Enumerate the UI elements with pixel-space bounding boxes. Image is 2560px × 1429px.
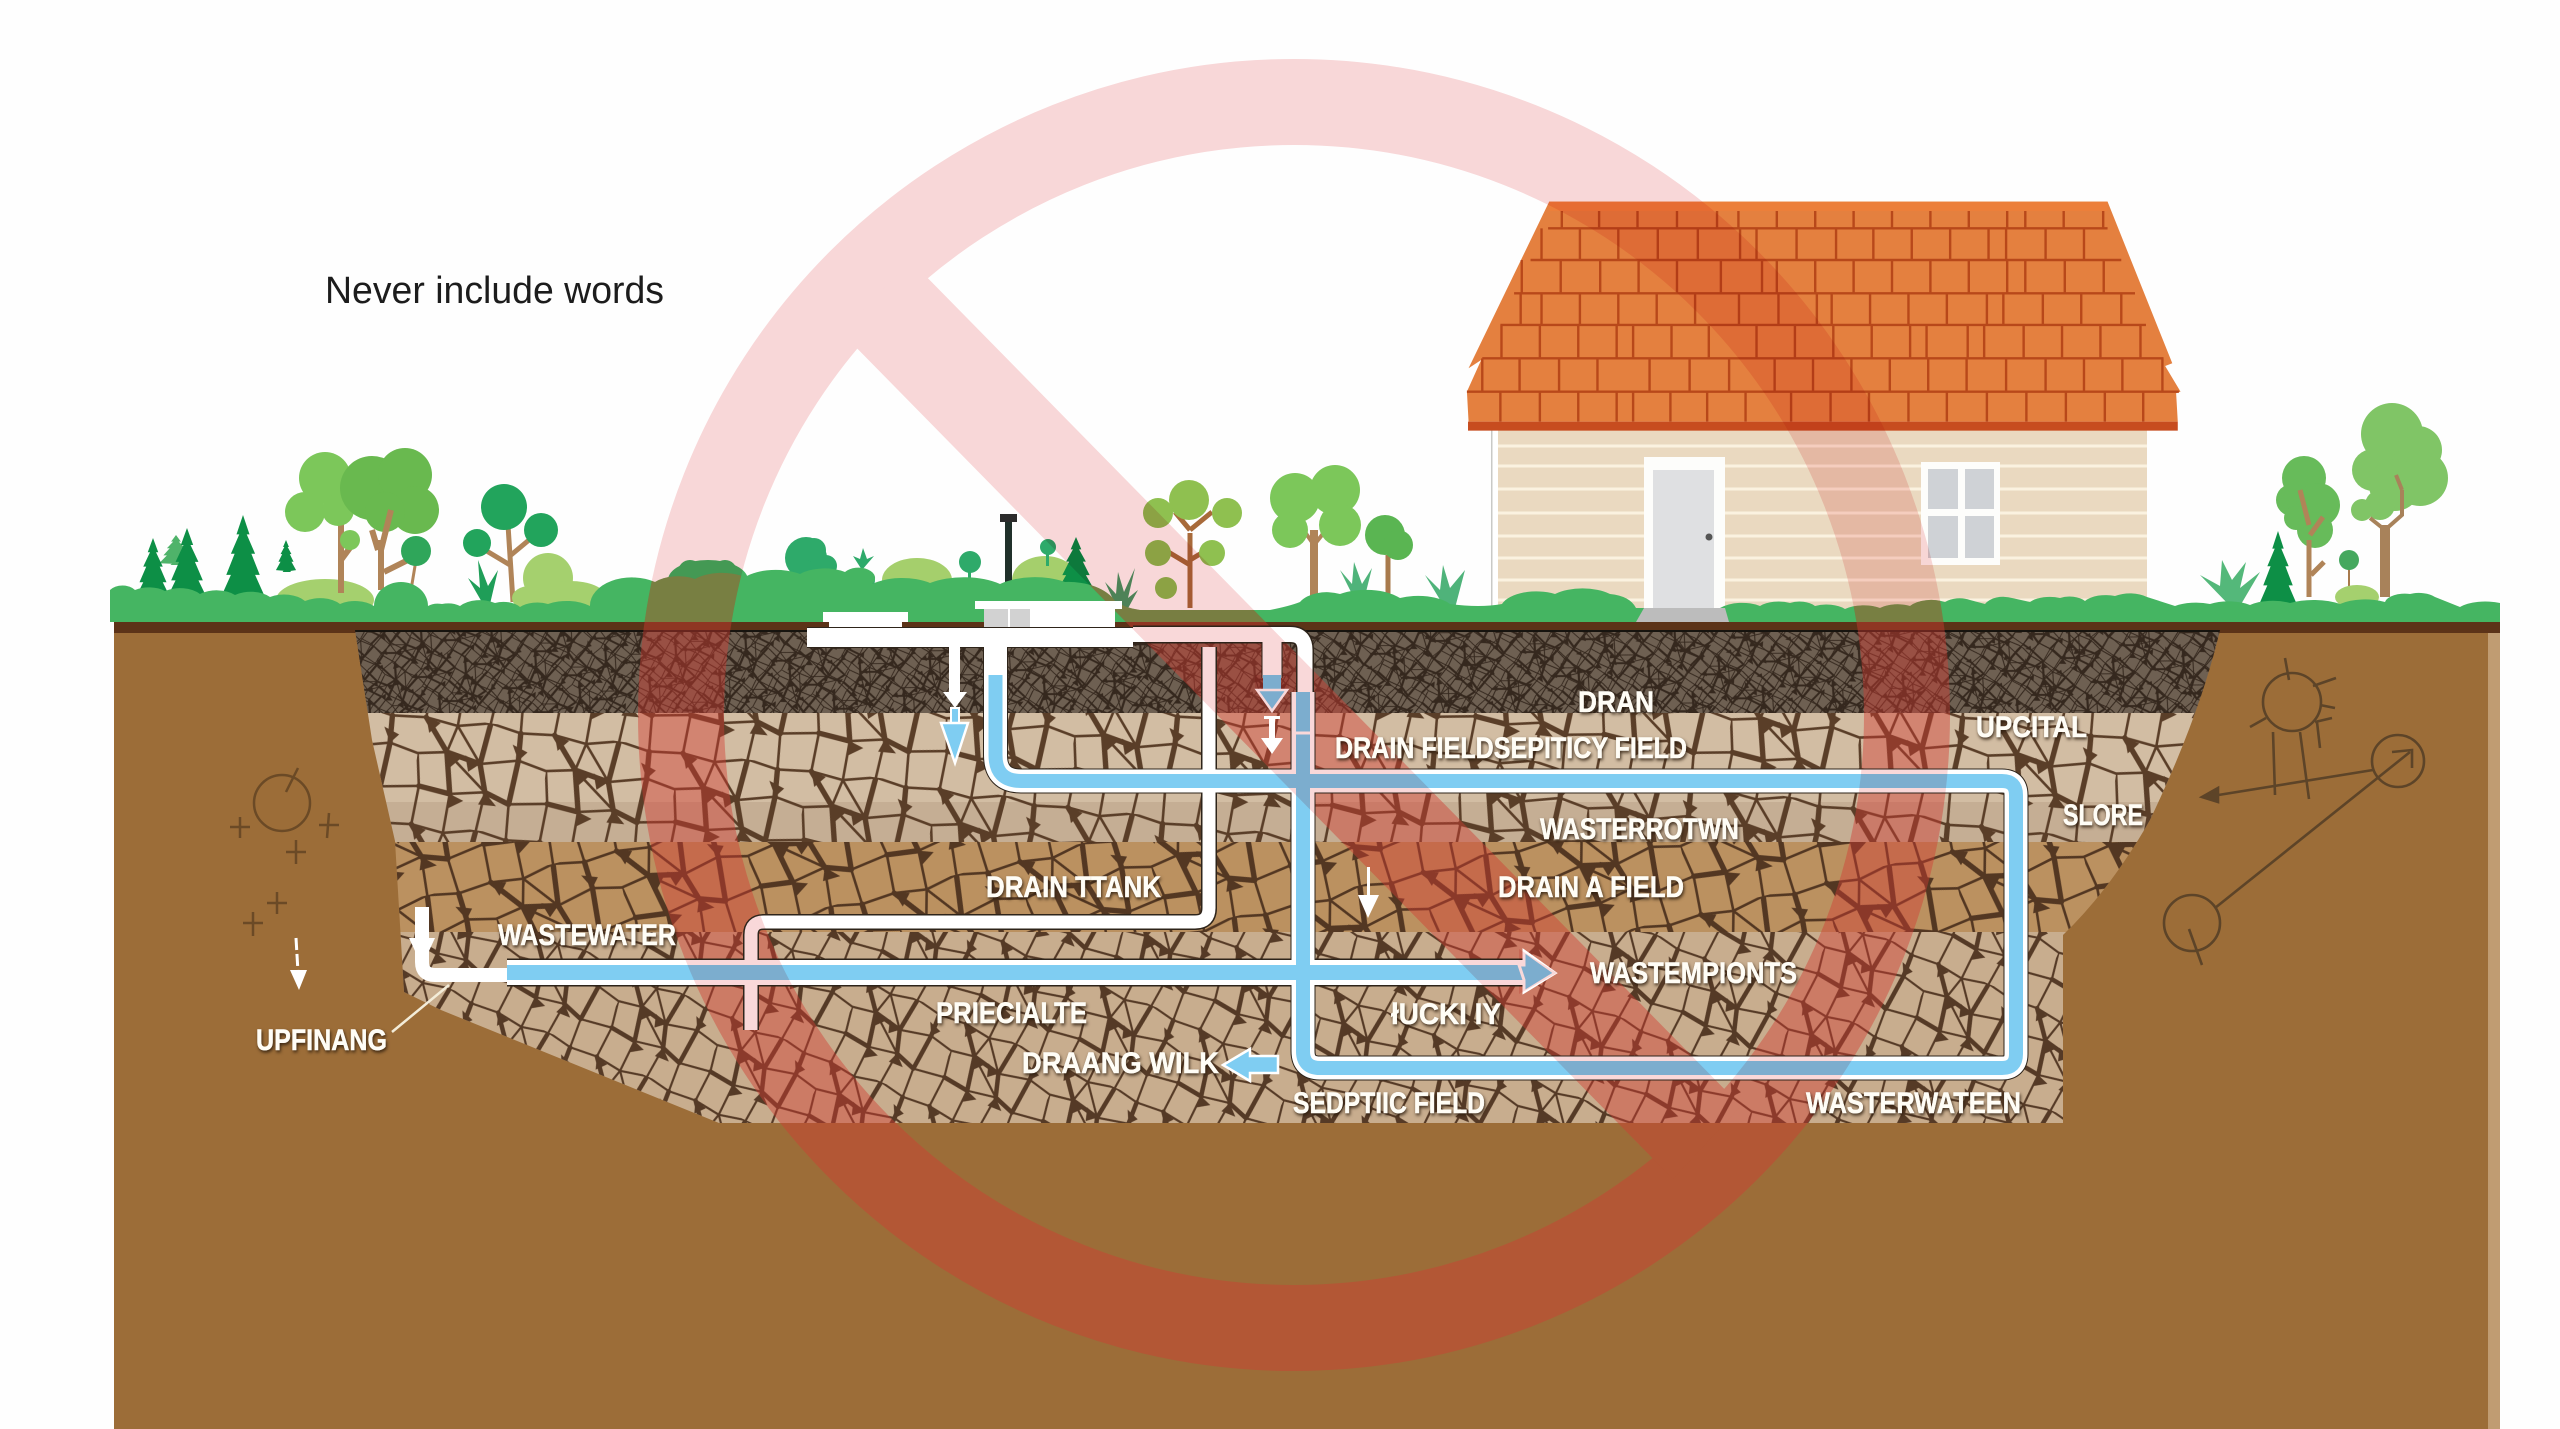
prohibition sign over soil <box>638 622 1950 1371</box>
prohibition sign over sky and house <box>644 59 1944 622</box>
prohibition sign over grass <box>644 572 1944 622</box>
window <box>1921 462 2000 565</box>
arrow: inlet elbow <box>409 907 507 975</box>
olive bush <box>668 560 748 600</box>
trees and shrubs: left group <box>135 448 605 621</box>
diagram labels <box>256 686 2143 1120</box>
label: UPCITAL: UPCITAL <box>1976 711 2087 744</box>
tree: three crowns <box>463 484 558 602</box>
tuft <box>1105 568 1138 612</box>
roof <box>1467 202 2181 431</box>
label: SEDPTIIC FIELD: SEDPTIIC FIELD <box>1293 1087 1485 1120</box>
septic vent post <box>1000 514 1017 590</box>
arrow: small white down <box>1261 716 1283 754</box>
tree: light crown <box>285 452 360 593</box>
small tree <box>2339 550 2359 589</box>
label: WASTEWATER: WASTEWATER <box>498 919 676 952</box>
small tree <box>1365 515 1413 596</box>
light bush <box>512 553 605 611</box>
tree: darker crown <box>340 448 439 590</box>
trees and shrubs: right group <box>2200 403 2448 611</box>
label: DRAN: DRAN <box>1578 686 1654 719</box>
arrow: drain field down <box>1358 867 1379 918</box>
pipe: white tubes <box>507 634 2016 1068</box>
hill bushes <box>785 537 875 590</box>
arrow: left soil dashed arrow <box>290 938 307 990</box>
pine trees <box>135 515 296 605</box>
house wall <box>1492 430 2147 622</box>
tuft <box>2200 560 2260 606</box>
sketch: right soil marks <box>2164 658 2424 965</box>
label: DRAANG WILK: DRAANG WILK <box>1022 1047 1219 1080</box>
oak sapling <box>1143 480 1242 608</box>
trees and shrubs: centre group <box>668 465 1465 612</box>
pipe network <box>507 634 2016 1068</box>
gravel drain field layers <box>340 622 2240 1123</box>
label: PRIECIALTE: PRIECIALTE <box>936 997 1087 1030</box>
small round tree <box>401 536 431 590</box>
caption: Never include words <box>325 270 664 312</box>
label: WASTEMPIONTS: WASTEMPIONTS <box>1590 957 1797 990</box>
small trees <box>959 539 1056 585</box>
door <box>1644 457 1725 608</box>
arrow: tank outlet down <box>941 628 968 763</box>
pine <box>1058 537 1094 593</box>
prohibition sign over pipes <box>686 627 1948 1080</box>
sketch: left soil marks <box>230 768 339 936</box>
arrow: second outlet down <box>1257 675 1287 711</box>
light bush <box>276 579 374 621</box>
arrow: drain field left <box>1223 1049 1278 1081</box>
tuft <box>468 560 498 604</box>
door step <box>1636 608 1729 622</box>
septic tank lids <box>823 601 1122 628</box>
label: SLORE: SLORE <box>2063 799 2143 832</box>
tufts <box>1340 562 1465 608</box>
pine <box>2258 531 2298 611</box>
house <box>1467 202 2181 622</box>
label: UPFINANG: UPFINANG <box>256 1024 387 1057</box>
tree A <box>2276 456 2340 597</box>
arrow: main wastewater arrowhead <box>1519 951 1555 992</box>
label: WASTERROTWN: WASTERROTWN <box>1540 813 1739 846</box>
leader line <box>392 985 449 1032</box>
pipe: dark outlines <box>507 634 2016 1068</box>
light bush <box>2335 585 2379 609</box>
label: KUCKI IY: łUCKI IY <box>1391 998 1501 1031</box>
label: DRAIN TTANK: DRAIN TTANK <box>986 871 1161 904</box>
grass strip <box>110 568 2500 622</box>
label: DRAIN A FIELD: DRAIN A FIELD <box>1498 871 1684 904</box>
label: WASTERWATEEN: WASTERWATEEN <box>1806 1087 2021 1120</box>
pipe: blue water <box>507 675 2016 1068</box>
label: DRAIN FIELDSEPITICY FIELD: DRAIN FIELDSEPITICY FIELD <box>1335 732 1687 765</box>
tree B <box>2351 403 2448 597</box>
soil cross-section <box>114 622 2500 1429</box>
round tree <box>1270 465 1361 597</box>
